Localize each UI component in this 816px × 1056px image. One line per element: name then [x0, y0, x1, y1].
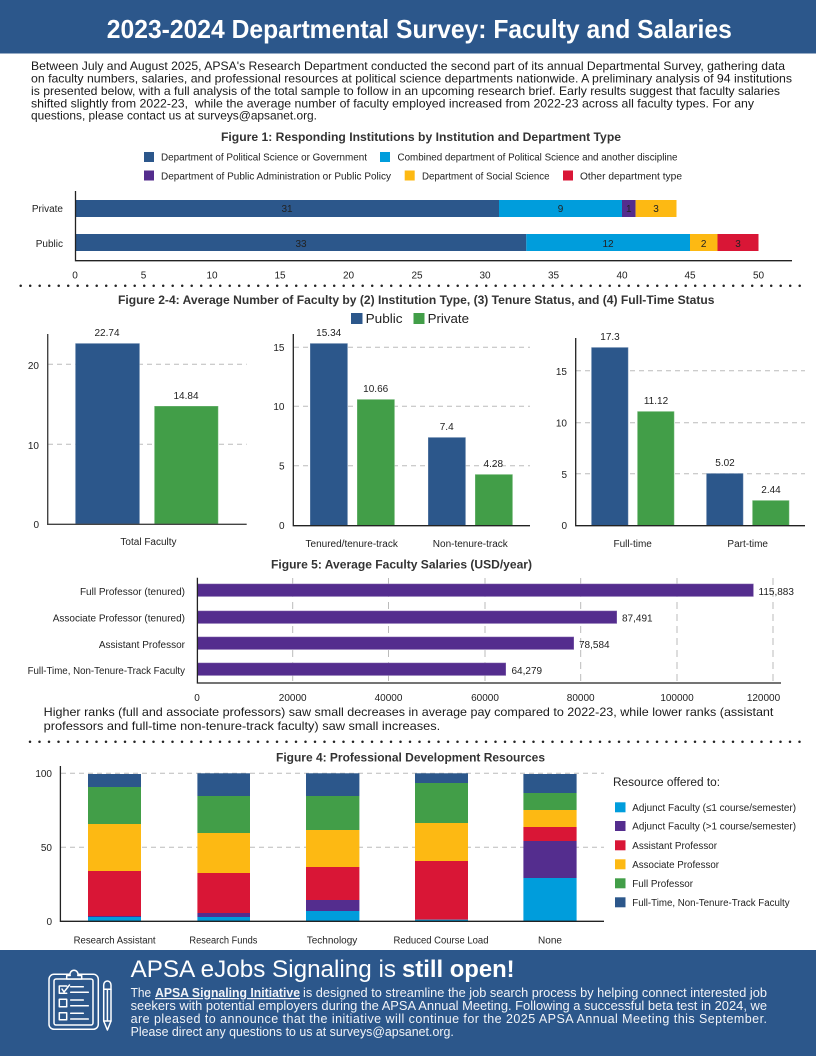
- column: research assistant: [88, 774, 141, 921]
- figure 3 bar chart: tenure status: 5: [279, 462, 285, 472]
- figure 3 bar chart: tenure status: 7.4: [440, 422, 454, 433]
- figure 2 bar chart: total faculty: Total Faculty: [120, 537, 177, 548]
- figure 1 stacked bar chart: 9: [558, 204, 564, 215]
- figure 5 horizontal bar chart: Full Professor (tenured): [80, 587, 185, 598]
- footer banner: [0, 950, 816, 1056]
- figure 2 bar chart: total faculty: [28, 328, 247, 548]
- figure 4 bar chart: full-time status: 0: [561, 521, 567, 532]
- figure 5 note: professors and full-time non-tenure-track faculty) saw small increases.: [44, 719, 440, 733]
- intro text block: on faculty numbers, salaries, and professional resources at political science departments nationwide. A preliminary analysis of 94 institutions: [31, 72, 792, 86]
- figure 1 legend: Department of Public Administration or Public Policy: [161, 172, 391, 182]
- legend: public and private: [351, 311, 469, 326]
- figure 1 legend: Department of Social Science: [422, 172, 550, 182]
- footer text block: APSA Signaling Initiative: [155, 986, 300, 1000]
- intro text block: Between July and August 2025, APSA's Research Department conducted the second part of its annual Departmental Survey, gathering data: [31, 59, 785, 73]
- stacked column chart: Reduced Course Load: [394, 936, 488, 946]
- legend: resource offered to: [613, 777, 796, 909]
- footer text block: are pleased to announce that the initiative will continue for the 2025 APSA Annual Meeting this September.: [131, 1012, 767, 1026]
- column: technology: [306, 773, 359, 921]
- panel: figure 5: [28, 558, 794, 733]
- figure 4 bar chart: full-time status: [556, 332, 805, 550]
- figure 1 heading: Figure 1: Responding Institutions by Institution and Department Type: [221, 130, 621, 144]
- footer text block: Please direct any questions to us at surveys@apsanet.org.: [131, 1025, 454, 1039]
- figure 4 bar chart: full-time status: 2.44: [761, 485, 781, 496]
- legend: resource offered to: Assistant Professor: [632, 841, 718, 852]
- figure 1 stacked bar chart: 15: [274, 270, 286, 282]
- figure 2 bar chart: total faculty: 22.74: [94, 328, 120, 339]
- figure 1 stacked bar chart: 31: [281, 204, 293, 215]
- figure 5 horizontal bar chart: 0: [194, 693, 200, 704]
- intro text block: shifted slightly from 2022-23, while the average number of faculty employed increased from 2022-23 across all faculty types. For any: [31, 96, 754, 110]
- figure 3 bar chart: tenure status: Non-tenure-track: [433, 539, 509, 550]
- figure 1 stacked bar chart: 33: [295, 239, 307, 250]
- figure 5 horizontal bar chart: 115,883: [758, 587, 794, 598]
- footer heading: [131, 956, 515, 983]
- stacked column chart: 0: [46, 917, 52, 928]
- footer text block: [131, 986, 767, 1039]
- legend: resource offered to: Full-Time, Non-Tenure-Track Faculty: [632, 898, 790, 909]
- figure 5 horizontal bar chart: 60000: [471, 693, 499, 704]
- figure 2 bar chart: total faculty: 10: [28, 441, 39, 452]
- figure 5 note: [44, 705, 774, 733]
- figure 4 bar chart: full-time status: 15: [556, 367, 567, 378]
- figure 4 bar chart: full-time status: 11.12: [644, 396, 669, 407]
- figure 4 bar chart: full-time status: Part-time: [727, 539, 768, 550]
- legend: resource offered to: Resource offered to:: [613, 777, 720, 789]
- stacked column chart: 50: [41, 843, 52, 854]
- figure 2 bar chart: total faculty: 0: [33, 520, 39, 531]
- professional development heading: Figure 4: Professional Development Resources: [276, 750, 545, 764]
- stacked column chart: Research Assistant: [74, 936, 156, 946]
- figure 5 note: Higher ranks (full and associate professors) saw small decreases in average pay compared to 2022-23, while lower ranks (assistant: [44, 705, 774, 719]
- figure 3 bar chart: tenure status: 15.34: [316, 328, 342, 339]
- figure 1 stacked bar chart: 1: [626, 204, 632, 215]
- figure 1 stacked bar chart: Public: [36, 239, 63, 250]
- figure 4 bar chart: full-time status: 5.02: [715, 458, 735, 469]
- legend: resource offered to: Adjunct Faculty (≤1 course/semester): [632, 803, 796, 814]
- figure 1 stacked bar chart: 45: [684, 270, 696, 282]
- figure 1 stacked bar chart: 40: [616, 270, 628, 282]
- panel: professional development resources: [35, 750, 796, 946]
- figure 2 bar chart: total faculty: 14.84: [173, 391, 199, 402]
- figure 1 legend: Combined department of Political Science and another discipline: [398, 152, 678, 164]
- figure 3 bar chart: tenure status: 4.28: [484, 459, 503, 470]
- figures 2-4 heading: Figure 2-4: Average Number of Faculty by (2) Institution Type, (3) Tenure Status, and (4) Full-Time Status: [118, 293, 715, 307]
- figure 3 bar chart: tenure status: 10: [273, 402, 285, 413]
- legend: public and private: Private: [428, 311, 469, 326]
- footer text block: The: [131, 986, 151, 1000]
- figure 5 horizontal bar chart: [28, 578, 794, 704]
- legend: public and private: Public: [366, 311, 403, 326]
- figure 5 horizontal bar chart: 120000: [747, 693, 781, 704]
- figure 1 stacked bar chart: 3: [735, 239, 741, 250]
- figure 1 stacked bar chart: 0: [72, 270, 78, 282]
- figure 1 stacked bar chart: 3: [653, 204, 659, 215]
- figure 5 horizontal bar chart: 78,584: [579, 640, 610, 651]
- legend: resource offered to: Adjunct Faculty (>1 course/semester): [632, 822, 796, 833]
- figure 3 bar chart: tenure status: Tenured/tenure-track: [306, 539, 399, 550]
- figure 5 horizontal bar chart: 87,491: [622, 614, 653, 624]
- figure 1 stacked bar chart: [32, 191, 792, 282]
- figure 5 horizontal bar chart: 40000: [375, 693, 403, 704]
- panel: figures 2-4: [28, 293, 805, 550]
- figure 1 stacked bar chart: Private: [32, 204, 63, 215]
- stacked column chart: 100: [35, 769, 52, 780]
- figure 1 stacked bar chart: 25: [411, 270, 423, 282]
- title: 2023-2024 Departmental Survey: Faculty and Salaries: [107, 14, 732, 44]
- figure 3 bar chart: tenure status: 10.66: [363, 384, 389, 395]
- stacked column chart: [35, 766, 604, 946]
- figure 1 stacked bar chart: 12: [602, 239, 614, 250]
- icon: clipboard and pencil: [49, 970, 111, 1030]
- footer text block: is designed to streamline the job search process by helping connect interested job: [303, 986, 767, 1000]
- figure 5 horizontal bar chart: Assistant Professor: [99, 640, 186, 651]
- figure 3 bar chart: tenure status: [273, 328, 530, 550]
- figure 1 stacked bar chart: 50: [753, 270, 764, 282]
- figure 5 horizontal bar chart: 100000: [660, 693, 694, 704]
- figure 1 legend: Other department type: [580, 172, 682, 182]
- figure 1 stacked bar chart: 35: [548, 270, 559, 282]
- figure 4 bar chart: full-time status: 5: [561, 470, 567, 481]
- panel: figure 1: [32, 130, 792, 282]
- stacked column chart: None: [538, 936, 562, 946]
- figure 3 bar chart: tenure status: 15: [273, 343, 285, 354]
- intro text block: [31, 59, 792, 122]
- figure 1 stacked bar chart: 2: [701, 239, 707, 250]
- figure 3 bar chart: tenure status: 0: [279, 521, 285, 532]
- figure 1 stacked bar chart: 5: [141, 270, 147, 282]
- figure 1 legend: [144, 152, 682, 182]
- figure 5 heading: Figure 5: Average Faculty Salaries (USD/year): [271, 558, 532, 572]
- figure 4 bar chart: full-time status: 17.3: [600, 332, 620, 343]
- column: reduced course load: [415, 773, 468, 921]
- figure 1 legend: Department of Political Science or Government: [161, 152, 367, 164]
- figure 1 stacked bar chart: 20: [343, 270, 354, 282]
- footer heading: still open!: [402, 956, 515, 983]
- legend: resource offered to: Full Professor: [632, 879, 694, 890]
- column: none: [523, 774, 577, 921]
- column: research funds: [197, 773, 250, 921]
- figure 5 horizontal bar chart: 80000: [567, 693, 595, 704]
- stacked column chart: Technology: [307, 936, 357, 946]
- intro text block: is presented below, with a full analysis of the total sample to follow in an upcoming research brief. Early results suggest that faculty salaries: [31, 84, 780, 98]
- figure 1 stacked bar chart: 10: [206, 270, 218, 282]
- figure 5 horizontal bar chart: Associate Professor (tenured): [53, 614, 185, 624]
- header banner: [0, 0, 816, 54]
- stacked column chart: Research Funds: [189, 936, 257, 946]
- figure 4 bar chart: full-time status: 10: [556, 418, 567, 430]
- figure 4 bar chart: full-time status: Full-time: [614, 539, 652, 550]
- footer text block: seekers with potential employers during the APSA Annual Meeting. Following a successful beta test in 2024, we: [131, 999, 767, 1013]
- figure 2 bar chart: total faculty: 20: [28, 361, 39, 372]
- figure 1 stacked bar chart: 30: [479, 270, 491, 282]
- figure 5 horizontal bar chart: Full-Time, Non-Tenure-Track Faculty: [28, 666, 185, 677]
- intro text block: questions, please contact us at surveys@apsanet.org.: [31, 108, 317, 122]
- figure 5 horizontal bar chart: 20000: [279, 693, 307, 704]
- legend: resource offered to: Associate Professor: [632, 860, 720, 871]
- figure 5 horizontal bar chart: 64,279: [512, 666, 543, 677]
- footer heading: APSA eJobs Signaling is: [131, 956, 396, 983]
